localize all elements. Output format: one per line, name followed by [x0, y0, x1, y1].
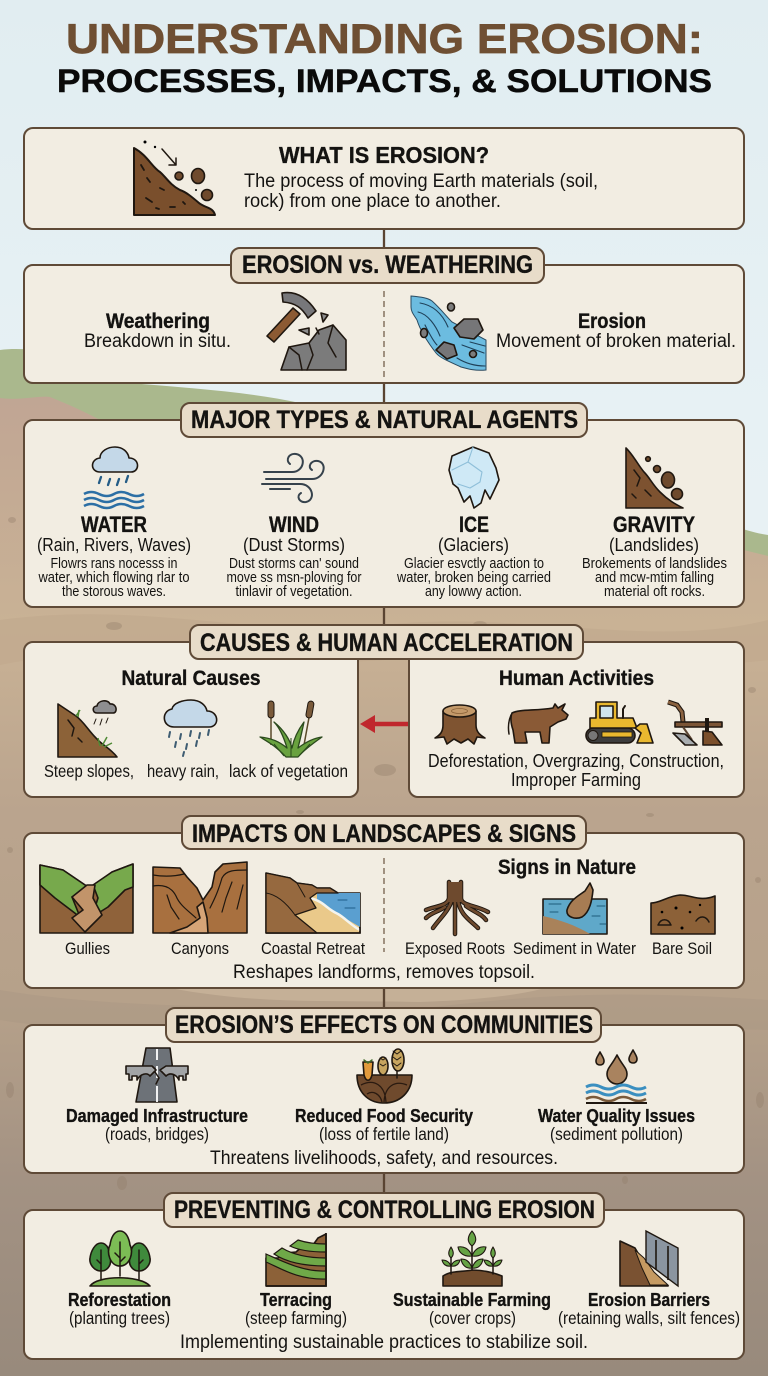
- activities text: Deforestation, Overgrazing, Construction,: [428, 750, 724, 771]
- weathering text: Weathering: [106, 310, 210, 333]
- icon: cow: [508, 704, 568, 743]
- reforestation text: Reforestation: [68, 1289, 171, 1310]
- erosion barriers text: (retaining walls, silt fences): [558, 1308, 740, 1328]
- icon: plow: [668, 702, 722, 745]
- damaged infrastructure text: (roads, bridges): [105, 1124, 209, 1144]
- icon: retaining wall and silt fence: [620, 1231, 678, 1286]
- heading: WHAT IS EROSION?: [279, 142, 489, 168]
- divider: [383, 858, 385, 952]
- food security text: Reduced Food Security: [295, 1105, 474, 1126]
- agent: gravity: material oft rocks.: [604, 584, 705, 600]
- water quality text: (sediment pollution): [550, 1124, 683, 1144]
- icon: exposed roots: [426, 882, 488, 934]
- agent: gravity: (Landslides): [609, 535, 699, 555]
- weathering text: Breakdown in situ.: [84, 331, 231, 352]
- panel: major types and natural agents: [24, 403, 744, 607]
- icon: seedlings in soil: [442, 1231, 502, 1286]
- label: Sediment in Water: [513, 939, 636, 958]
- summary: Implementing sustainable practices to stabilize soil.: [180, 1331, 588, 1353]
- agent: wind: Dust storms can' sound: [229, 556, 359, 572]
- activities text: [428, 750, 724, 790]
- damaged infrastructure text: [66, 1105, 248, 1144]
- panel: impacts on landscapes and signs: [24, 816, 744, 988]
- water quality text: Water Quality Issues: [538, 1105, 695, 1126]
- reforestation text: [68, 1289, 171, 1328]
- icon: sediment drops over water: [586, 1050, 647, 1103]
- erosion text: [496, 310, 736, 352]
- summary: Reshapes landforms, removes topsoil.: [233, 962, 535, 983]
- agent: ice: any lowwy action.: [425, 584, 522, 600]
- agent: ice: ICE: [459, 512, 489, 537]
- arrow: human activities accelerate natural causes: [360, 715, 409, 733]
- icon: tree stump: [435, 705, 485, 744]
- title: UNDERSTANDING EROSION:: [66, 15, 703, 62]
- icon: rain cloud over waves: [84, 447, 144, 508]
- title: [57, 15, 712, 99]
- icon: gullies: [40, 864, 133, 933]
- agent: wind: move ss msn-ploving for: [226, 570, 362, 586]
- agent: water: (Rain, Rivers, Waves): [37, 535, 191, 555]
- icon: river carrying rocks: [411, 296, 486, 370]
- agent: gravity: [582, 448, 727, 600]
- food security text: [295, 1105, 474, 1144]
- sign heading: Signs in Nature: [498, 856, 636, 879]
- summary: Threatens livelihoods, safety, and resources.: [210, 1147, 558, 1169]
- icon: wind swirls: [262, 454, 324, 502]
- terracing text: (steep farming): [245, 1308, 347, 1328]
- heading pill: MAJOR TYPES & NATURAL AGENTS: [191, 406, 578, 434]
- agent: gravity: Brokements of landslides: [582, 556, 727, 572]
- causes labels: [44, 761, 348, 781]
- icon: trees: [90, 1231, 150, 1286]
- icon: landslide: [626, 448, 683, 508]
- icon: rain cloud: [164, 700, 217, 756]
- agent: wind: (Dust Storms): [243, 535, 345, 555]
- title: PROCESSES, IMPACTS, & SOLUTIONS: [57, 63, 712, 99]
- icon: reeds and grass: [260, 701, 322, 757]
- icon: coastal retreat: [266, 873, 360, 933]
- icon: eroding slope with falling rocks: [134, 140, 215, 215]
- icon: steep slope with rain: [58, 701, 117, 757]
- heading pill: EROSION’S EFFECTS ON COMMUNITIES: [175, 1011, 593, 1039]
- definition text: rock) from one place to another.: [244, 190, 501, 212]
- causes labels: heavy rain,: [147, 761, 219, 781]
- panel: what is erosion: [24, 128, 744, 229]
- agent: ice: [396, 447, 551, 600]
- definition text: The process of moving Earth materials (soil,: [244, 170, 598, 192]
- icon: damaged road and bridge: [126, 1048, 188, 1102]
- icon: canyons: [153, 862, 247, 933]
- label: Gullies: [65, 939, 110, 958]
- panel: natural causes: [24, 642, 358, 797]
- icon: crops in soil bowl: [357, 1049, 412, 1103]
- agent: water: the storous waves.: [62, 584, 166, 600]
- food security text: (loss of fertile land): [319, 1124, 449, 1144]
- agent: gravity: GRAVITY: [613, 512, 695, 537]
- heading: Natural Causes: [122, 667, 260, 690]
- heading: Human Activities: [499, 667, 654, 690]
- icon: glacier: [449, 447, 499, 508]
- agent: wind: [226, 454, 362, 600]
- heading pill: IMPACTS ON LANDSCAPES & SIGNS: [192, 820, 576, 848]
- agent: ice: water, broken being carried: [396, 570, 551, 586]
- heading pill: PREVENTING & CONTROLLING EROSION: [174, 1196, 595, 1224]
- damaged infrastructure text: Damaged Infrastructure: [66, 1105, 248, 1126]
- water quality text: [538, 1105, 695, 1144]
- erosion barriers text: [558, 1289, 740, 1328]
- sustainable farming text: [393, 1289, 551, 1328]
- icon: sediment in water: [543, 883, 607, 934]
- sustainable farming text: (cover crops): [429, 1308, 516, 1328]
- icon: hammer breaking rock: [267, 293, 346, 370]
- definition text: [244, 170, 598, 212]
- heading pill: causes and human acceleration: CAUSES & HUMAN ACCELERATION: [200, 629, 573, 657]
- terracing text: Terracing: [260, 1289, 332, 1310]
- panel: preventing and controlling erosion: [24, 1193, 744, 1359]
- erosion text: Erosion: [578, 310, 646, 333]
- agent: wind: tinlavir of vegetation.: [236, 584, 352, 600]
- agent: ice: Glacier esvctly aaction to: [404, 556, 544, 572]
- divider: [383, 291, 385, 378]
- activities text: Improper Farming: [511, 769, 641, 790]
- terracing text: [245, 1289, 347, 1328]
- agent: water: water, which flowing rlar to: [38, 570, 189, 586]
- erosion text: Movement of broken material.: [496, 331, 736, 352]
- causes labels: Steep slopes,: [44, 761, 134, 781]
- panel: effects on communities: [24, 1008, 744, 1173]
- icon: terraces: [266, 1233, 326, 1286]
- label: Canyons: [171, 939, 229, 958]
- causes labels: lack of vegetation: [229, 761, 348, 781]
- heading pill: EROSION vs. WEATHERING: [242, 251, 533, 279]
- agent: water: [37, 447, 191, 600]
- panel: erosion vs weathering: [24, 248, 744, 383]
- agent: ice: (Glaciers): [438, 535, 509, 555]
- panel: human activities: [409, 642, 744, 797]
- label: Bare Soil: [652, 939, 712, 958]
- agent: gravity: and mcw-mtim falling: [595, 570, 714, 586]
- label: Coastal Retreat: [261, 939, 365, 958]
- sustainable farming text: Sustainable Farming: [393, 1289, 551, 1310]
- erosion barriers text: Erosion Barriers: [588, 1289, 710, 1310]
- label: Exposed Roots: [405, 939, 505, 958]
- reforestation text: (planting trees): [69, 1308, 170, 1328]
- connector line: [383, 229, 385, 1194]
- agent: wind: WIND: [269, 512, 319, 537]
- icon: bulldozer: [586, 702, 653, 743]
- agent: water: Flowrs rans nocesss in: [50, 556, 178, 572]
- weathering text: [84, 310, 231, 352]
- agent: water: WATER: [81, 512, 147, 537]
- icon: bare soil: [651, 895, 715, 934]
